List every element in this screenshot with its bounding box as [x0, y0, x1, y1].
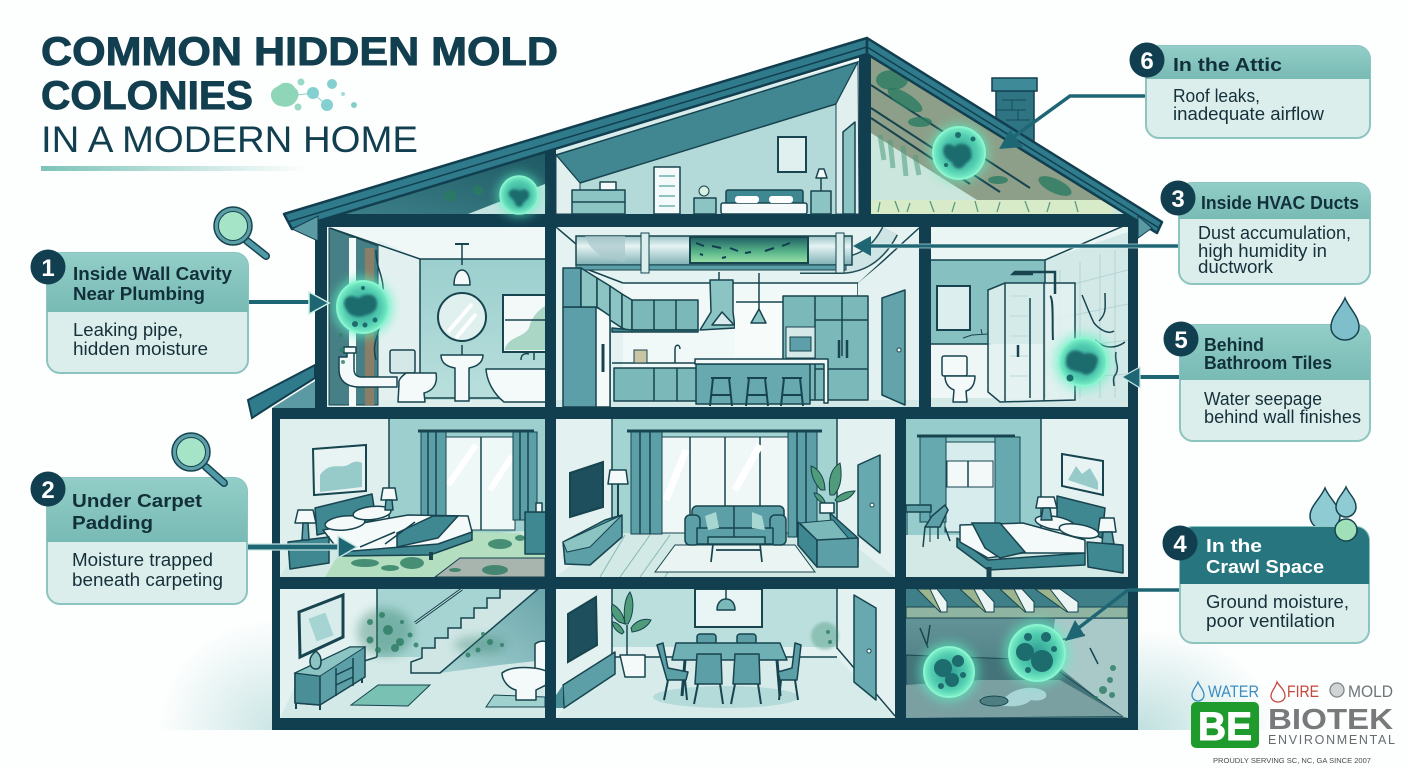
moldy duct section: [690, 237, 808, 263]
mold orb: [929, 123, 989, 183]
icon: water: [1192, 682, 1204, 701]
number badge: 5: [1174, 327, 1188, 354]
panel 6: in the attic: [1130, 42, 1370, 138]
attic right: mold on rafters: [871, 56, 1128, 214]
structure frame: [272, 52, 1139, 730]
company name: BIOTEK: [1268, 704, 1393, 736]
panel body: Leaking pipe,: [73, 320, 183, 340]
icon: mold spores: [271, 78, 357, 111]
mold orb: [333, 277, 393, 337]
panel heading: Inside Wall Cavity: [73, 263, 233, 284]
panel body line 2: hidden moisture: [73, 339, 208, 359]
title underline: [41, 166, 306, 171]
panel heading line 2: Crawl Space: [1206, 556, 1324, 577]
lower side roof: [248, 365, 315, 418]
room: bathroom with wall cavity: [327, 227, 548, 407]
panel body: Water seepage: [1204, 389, 1322, 409]
room: living room: [556, 419, 895, 577]
icon: water drops behind panel 4: [1310, 487, 1356, 530]
number badge: [30, 250, 66, 284]
icon: magnifier 1: [214, 207, 266, 256]
panel body line 2: behind wall finishes: [1204, 407, 1361, 427]
number badge: 3: [1171, 186, 1185, 213]
number badge: [1130, 42, 1164, 78]
icon: water drop: [1331, 298, 1359, 340]
heading line 1: COMMON HIDDEN MOLD: [41, 30, 558, 74]
panel body: Moisture trapped: [72, 550, 213, 570]
number badge: [30, 472, 66, 506]
number badge: [1162, 526, 1198, 560]
arrow: 4 to crawl space: [1065, 590, 1180, 641]
room: crawl space with joists and mold: [906, 589, 1128, 718]
icon: fire: [1271, 682, 1285, 702]
panel heading line 2: Bathroom Tiles: [1204, 352, 1332, 373]
mold orb: [1004, 620, 1070, 686]
panel heading: In the Attic: [1173, 54, 1282, 75]
arrow: 5 to bathroom tiles: [1122, 367, 1180, 388]
number badge: [1164, 322, 1198, 356]
panel heading: Under Carpet: [72, 490, 202, 511]
number badge: 6: [1140, 48, 1154, 75]
room: bathroom with cracked tiles: [931, 224, 1128, 407]
room: dining room: [556, 589, 895, 718]
panel 1: inside wall cavity: [30, 250, 248, 373]
icon: mold: [1330, 683, 1344, 697]
panel body line 2: poor ventilation: [1206, 611, 1335, 631]
panel body line 2: high humidity in: [1198, 241, 1327, 261]
icon: magnifier 2: [172, 433, 224, 483]
panel 2: under carpet padding: [30, 472, 247, 604]
arrow: 1 to wall cavity: [248, 292, 329, 314]
tagline: PROUDLY SERVING SC, NC, GA SINCE 2007: [1213, 756, 1371, 765]
icon: green bubble: [1335, 519, 1357, 541]
panel heading: Inside HVAC Ducts: [1201, 192, 1359, 213]
panel heading line 2: Near Plumbing: [73, 283, 205, 304]
panel 4: in the crawl space: [1162, 519, 1369, 643]
number badge: 1: [41, 255, 55, 282]
roof: [284, 38, 1162, 241]
panel body: Dust accumulation,: [1198, 223, 1351, 243]
panel 3: inside HVAC ducts: [1160, 180, 1370, 284]
service label: fire: FIRE: [1287, 682, 1319, 701]
panel body line 2: inadequate airflow: [1173, 104, 1325, 124]
panel body: Ground moisture,: [1206, 592, 1349, 612]
room: bedroom right: [906, 419, 1128, 577]
logo: BE Biotek Environmental: [1191, 682, 1395, 765]
mold orb: [919, 642, 979, 702]
number badge: [1160, 180, 1196, 216]
mold orb: [1054, 333, 1112, 391]
attic bedroom: [556, 60, 859, 214]
logo mark: BE: [1198, 705, 1252, 749]
service label: mold: MOLD: [1348, 682, 1393, 701]
number badge: 2: [41, 477, 55, 504]
subheading: IN A MODERN HOME: [41, 119, 418, 160]
panel heading: In the: [1206, 535, 1262, 556]
panel heading line 2: Padding: [72, 512, 153, 533]
title block: [41, 30, 558, 171]
mold orb: [497, 173, 541, 217]
panel body line 3: ductwork: [1198, 257, 1274, 277]
attic left void with mold: [334, 152, 545, 217]
arrow: 6 to attic: [999, 96, 1146, 149]
company descriptor: ENVIRONMENTAL: [1268, 733, 1395, 747]
room: bedroom with carpet mold: [280, 419, 547, 577]
panel 5: behind bathroom tiles: [1164, 322, 1370, 441]
heading line 2: COLONIES: [41, 74, 253, 118]
arrow: 3 to HVAC duct: [853, 236, 1179, 256]
arrow: 2 to carpet padding: [247, 536, 357, 558]
panel body: Roof leaks,: [1173, 86, 1260, 106]
room: kitchen with HVAC duct: [556, 227, 919, 407]
service label: water: WATER: [1208, 682, 1259, 701]
number badge: 4: [1173, 531, 1187, 558]
room: stair hall with wall mold: [280, 589, 547, 718]
panel body line 2: beneath carpeting: [72, 570, 223, 590]
house cutaway: [248, 38, 1162, 730]
chimney: [992, 78, 1037, 146]
panel heading: Behind: [1204, 334, 1264, 355]
